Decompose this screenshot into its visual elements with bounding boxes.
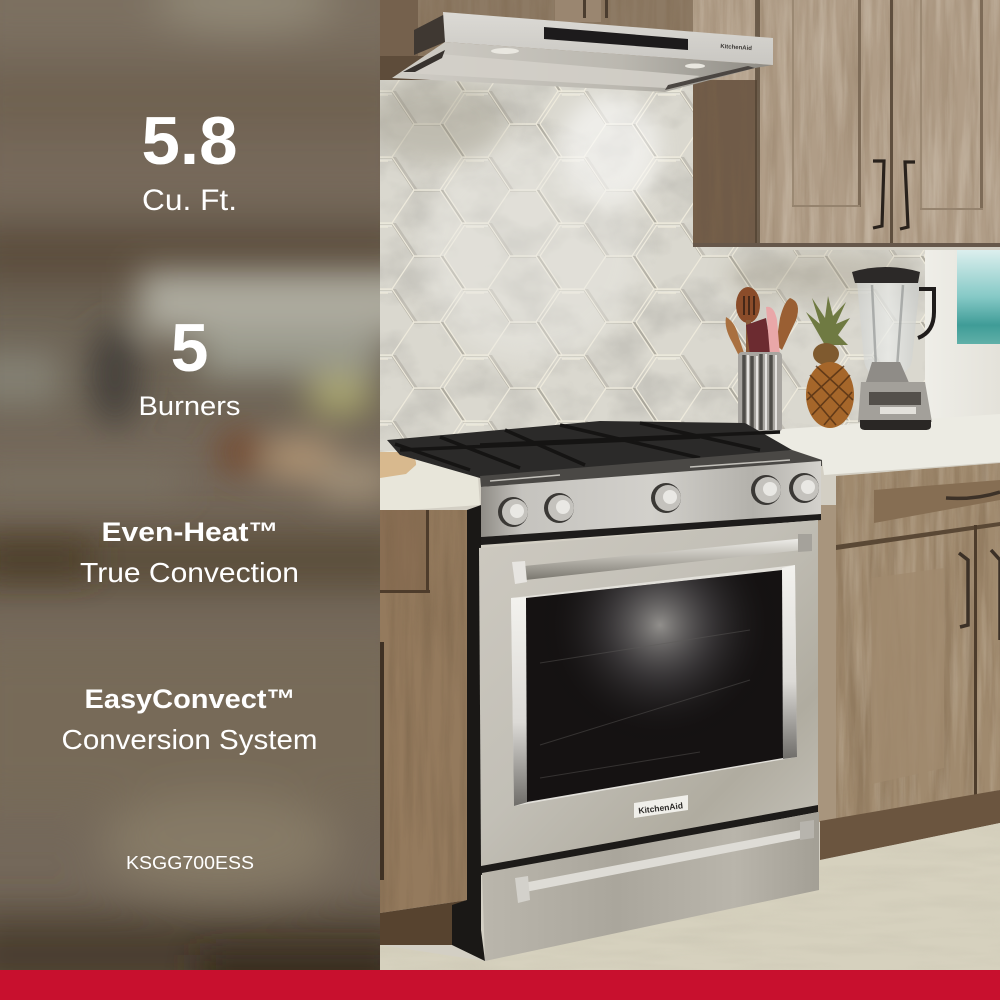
hood control display [544, 27, 688, 50]
toe kick left [380, 900, 468, 945]
backsplash tile [380, 80, 925, 451]
floor [380, 823, 1000, 970]
spec: 5 Burners: Burners [138, 391, 240, 421]
spec: 5 Burners [140, 324, 240, 416]
spec: 5.8 Cu. Ft.: 5.8 [142, 103, 238, 179]
cutting board [380, 452, 416, 478]
pineapple [806, 296, 854, 428]
logo badge [634, 795, 688, 818]
red footer bar [0, 970, 1000, 1000]
warming drawer [482, 812, 819, 961]
blurred side panel [0, 0, 380, 970]
countertop right [740, 414, 1000, 475]
door gap [481, 805, 818, 875]
spec: Even-Heat True Convection [80, 522, 297, 582]
utensil holder with utensils [726, 287, 798, 432]
spec: EasyConvect Conversion System: Conversion System [62, 724, 318, 755]
gas range [387, 421, 822, 961]
spec: Even-Heat True Convection: True Convection [80, 557, 299, 588]
cooktop grates [387, 421, 822, 487]
kitchen photograph [365, 0, 1000, 970]
side panel beside range [818, 505, 837, 822]
knobs [498, 473, 819, 527]
lower right cabinets [836, 462, 1000, 824]
upper left cabinets [380, 0, 693, 80]
blender [852, 267, 934, 430]
toe kick right [820, 790, 1000, 860]
oven door [479, 520, 818, 866]
control panel [481, 461, 821, 545]
logo badge: KitchenAid [638, 800, 684, 816]
cabinet pulls [873, 161, 915, 229]
window frame [511, 565, 797, 806]
wall and artwork [925, 250, 1000, 425]
range hood [392, 12, 773, 92]
spec: EasyConvect Conversion System [62, 684, 318, 755]
spec: 5.8 Cu. Ft.: Cu. Ft. [142, 184, 237, 217]
oven handle [512, 534, 812, 584]
drawer handle [515, 820, 814, 903]
oven glass [526, 570, 783, 802]
spec: 5 Burners: 5 [171, 310, 208, 386]
hood logo: KitchenAid [720, 44, 752, 52]
upper right cabinets [693, 0, 1000, 248]
lower cabinet handles [946, 492, 1000, 640]
lower left cabinet [380, 508, 470, 918]
countertop left [380, 448, 480, 512]
spec: EasyConvect Conversion System: EasyConvect™ [84, 684, 296, 714]
spec: Even-Heat True Convection: Even-Heat™ [102, 517, 278, 547]
spec: 5.8 Cu. Ft. [144, 116, 236, 210]
model number: KSGG700ESS [126, 853, 254, 873]
